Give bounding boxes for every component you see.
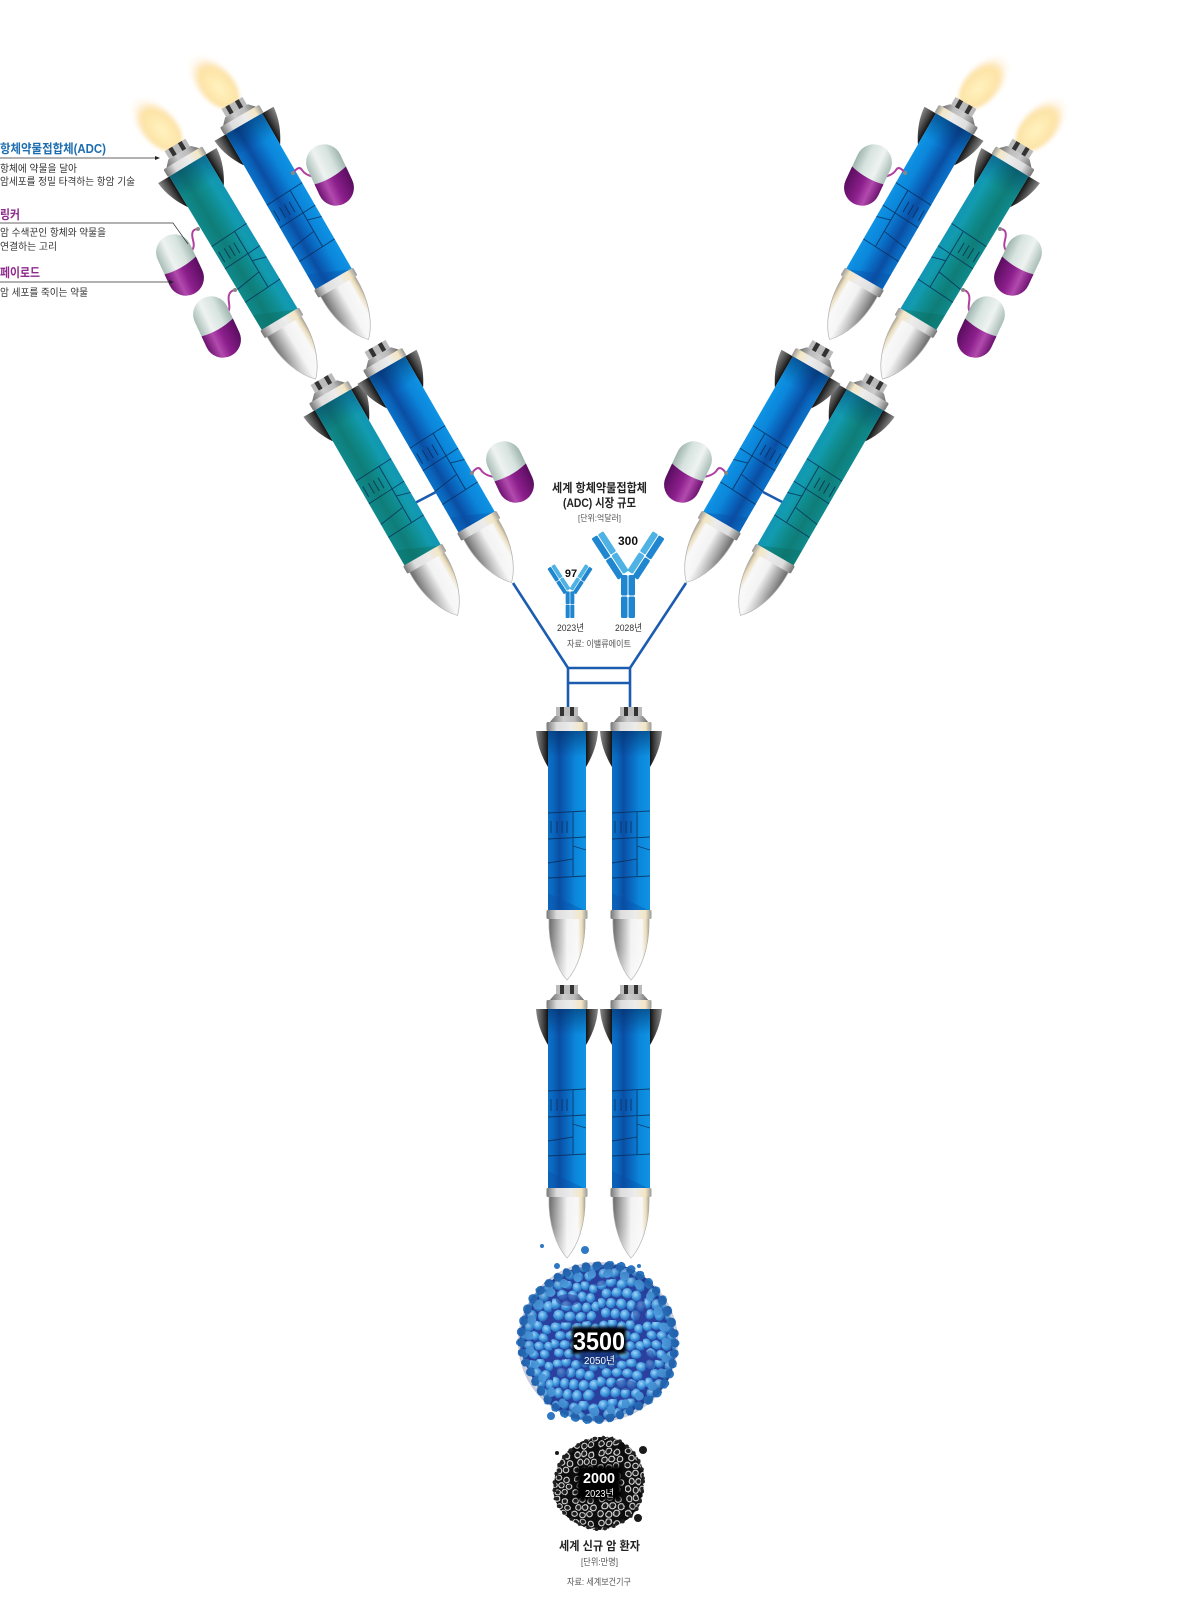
rocket: stem lower right [600,985,662,1258]
heading: new cancer patients: 세계 신규 암 환자 [559,1539,640,1553]
cancer cell: 2050: 3500 [573,1328,625,1356]
antibody icon: 2023 value 97: 97 [565,568,577,580]
capsule: payload 2 [150,228,210,302]
cancer cell: 2023 [552,1437,647,1529]
rocket: lower-right teal [711,362,907,632]
rocket: stem lower left [536,985,598,1258]
antibody linker connectors [413,492,786,707]
antibody icon: 2023 value 97 [547,564,593,634]
linker squiggles to payload capsules [187,168,1011,477]
annotation: ADC: 암세포를 정밀 타격하는 항암 기술 [0,175,135,188]
annotation: ADC [0,141,160,188]
rocket: lower-left teal [291,362,487,632]
cancer cell: 2023: 2000 [583,1470,615,1487]
annotation: payload [0,266,174,299]
annotation: payload: 페이로드 [0,266,40,280]
rocket: upper-right blue with flame [800,33,1026,356]
annotation: linker: 암 수색꾼인 항체와 약물을 [0,227,106,239]
heading: new cancer patients: 자료: 세계보건기구 [567,1576,631,1587]
heading: new cancer patients: [단위:만명] [581,1557,618,1567]
annotation: linker: 연결하는 고리 [0,240,57,253]
annotation: payload: 암 세포를 죽이는 약물 [0,287,88,299]
capsule: payload 7 [951,290,1011,364]
antibody icon: 2028 value 300: 2028년 [615,623,642,634]
annotation: linker [0,208,188,253]
rocket: upper-right teal with flame [853,75,1084,397]
capsule: payload 8 [658,435,718,509]
antibody icon: 2028 value 300 [591,531,665,634]
heading: ADC market size: [단위:억달러] [578,513,621,523]
capsule: payload 3 [187,290,247,364]
antibody icon: 2023 value 97: 2023년 [557,623,584,634]
heading: ADC market size: (ADC) 시장 규모 [563,496,636,510]
annotation: ADC: 항체약물접합체(ADC) [0,141,106,156]
rocket: lower-right blue [657,329,853,599]
capsule: payload 6 [988,228,1048,302]
source: market: 자료: 이밸류에이트 [567,639,631,649]
rocket: stem upper left [536,707,598,980]
rocket: upper-left teal with flame [114,75,345,397]
antibody icon: 2028 value 300: 300 [618,534,638,548]
cancer cell: 2050: 2050년 [584,1355,615,1367]
rocket: upper-left blue with flame [172,33,398,356]
capsule: payload 1 [300,138,360,212]
rocket: stem upper right [600,707,662,980]
capsule: payload 4 [480,435,540,509]
capsule: payload 5 [838,138,898,212]
heading: ADC market size [552,480,647,523]
annotation: linker: 링커 [0,208,20,222]
heading: ADC market size: 세계 항체약물접합체 [552,480,647,495]
cancer cell: 2050 [518,1244,678,1422]
rocket: lower-left blue [345,329,541,599]
heading: new cancer patients [559,1539,640,1587]
cancer cell: 2023: 2023년 [585,1488,614,1500]
annotation: ADC: 항체에 약물을 달아 [0,163,77,175]
